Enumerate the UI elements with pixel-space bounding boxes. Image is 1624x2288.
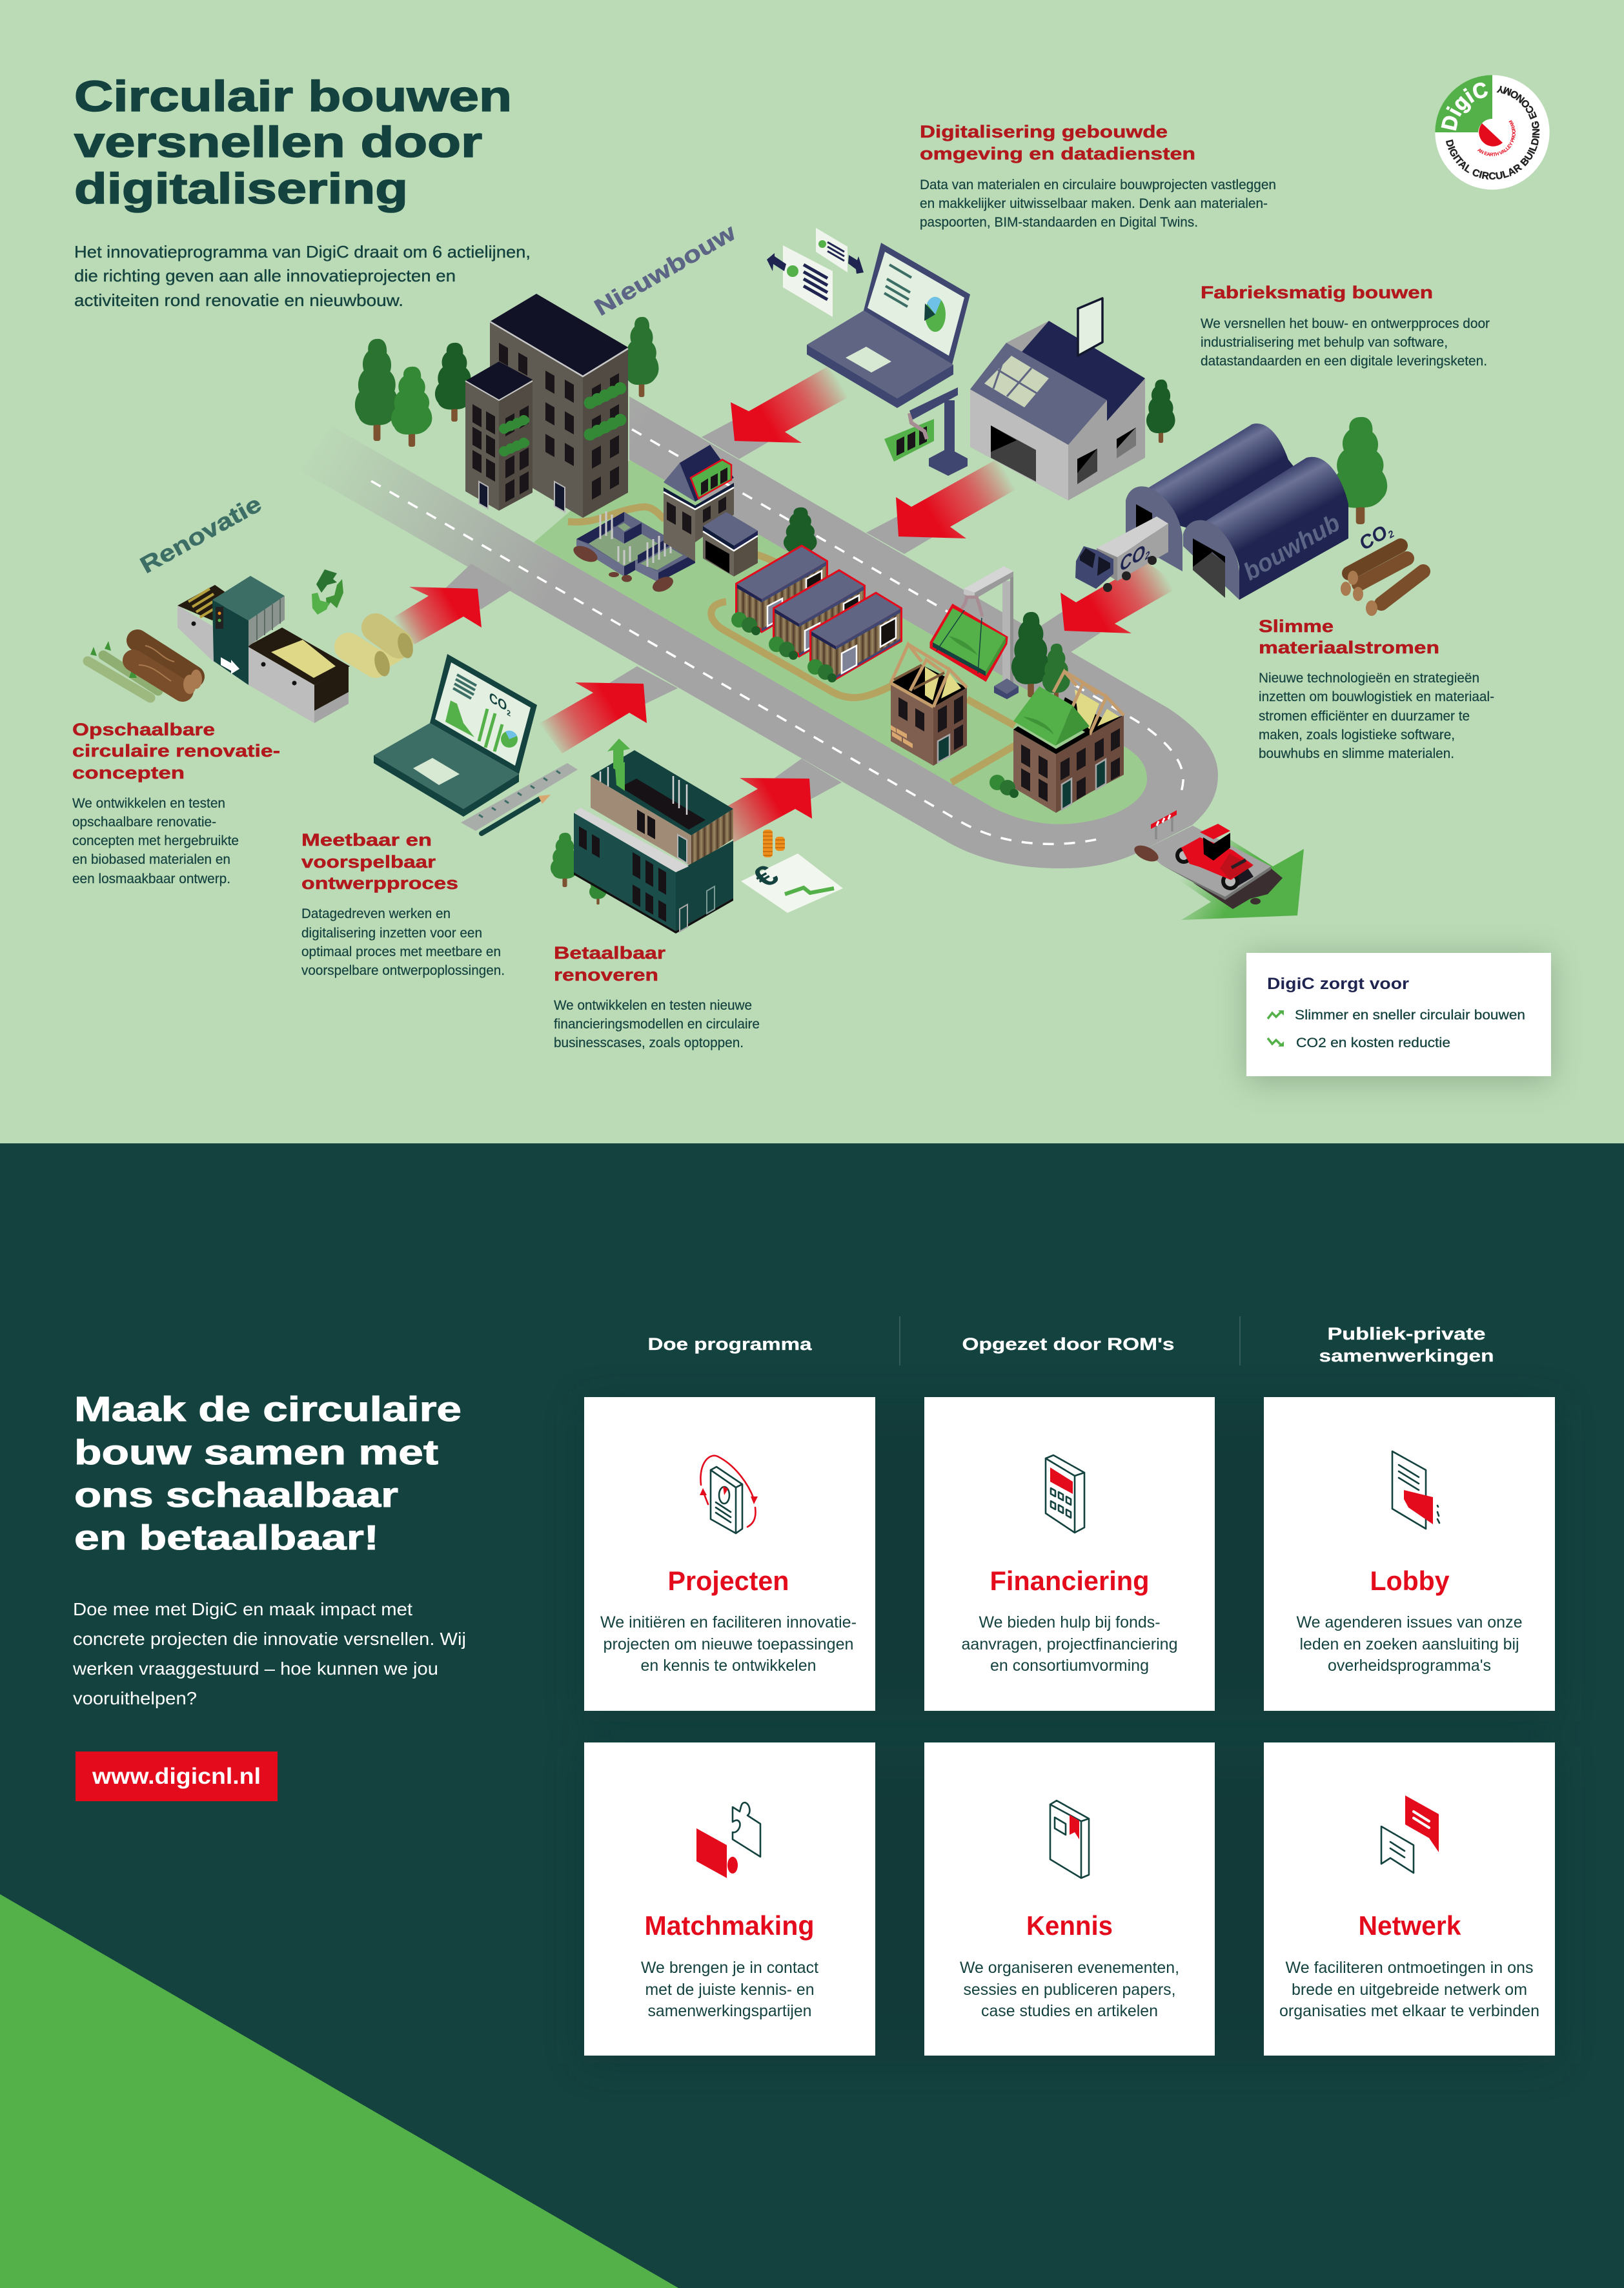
action line: Meetbaar en voorspelbaar ontwerpproces: voorspelbaar	[301, 852, 436, 872]
road roller on new road slab	[1132, 824, 1283, 909]
red arrow: affordable renovation	[728, 778, 812, 843]
map: side streets	[445, 421, 1101, 799]
house with green dormer	[664, 445, 758, 577]
action line: Digitalisering gebouwde omgeving en datadiensten	[920, 122, 1276, 230]
card: Matchmaking: samenwerkingspartijen	[648, 2002, 812, 2020]
map: lawn inside road loop	[534, 455, 1149, 835]
card: Lobby	[1264, 1397, 1555, 1711]
action line: Slimme materiaalstromen: Slimme	[1259, 617, 1334, 636]
red arrow: smart material flows	[1061, 562, 1181, 633]
logs with CO2 label: 2	[1386, 528, 1397, 541]
action line: Slimme materiaalstromen: inzetten om bouwlogistiek en materiaal-	[1259, 689, 1494, 704]
action line: Fabrieksmatig bouwen: Fabrieksmatig bouwen	[1201, 283, 1433, 302]
text: call to action: werken vraaggestuurd – hoe kunnen we jou	[72, 1659, 438, 1679]
title: versnellen door	[74, 118, 482, 167]
renovated house with open roof	[891, 644, 967, 766]
text: call to action: Doe mee met DigiC en maak impact met	[73, 1599, 412, 1619]
action line: Digitalisering gebouwde omgeving en datadiensten: en makkelijker uitwisselbaar maken. Denk aan materialen-	[920, 196, 1268, 211]
column headers: Doe programma	[648, 1334, 813, 1354]
action line: Meetbaar en voorspelbaar ontwerpproces: Datagedreven werken en	[301, 906, 451, 921]
button: www.digicnl.nl	[76, 1752, 278, 1801]
action line: Slimme materiaalstromen: maken, zoals logistieke software,	[1259, 728, 1455, 742]
plate with euro sign and rising arrow: €	[745, 859, 786, 894]
heading: Maak de circulaire bouw: bouw samen met	[74, 1433, 438, 1472]
action line: Digitalisering gebouwde omgeving en datadiensten: Data van materialen en circulaire bouwprojecten vastleggen	[920, 178, 1276, 192]
green corner triangle	[0, 1894, 678, 2288]
house with green roof	[990, 671, 1124, 813]
card: Matchmaking	[584, 1742, 875, 2056]
action line: Opschaalbare circulaire renovatieconcepten: concepten	[72, 763, 185, 782]
plate with euro sign and rising arrow	[741, 853, 843, 913]
action line: Meetbaar en voorspelbaar ontwerpproces: digitalisering inzetten voor een	[301, 926, 482, 941]
action line: Slimme materiaalstromen	[1259, 617, 1494, 761]
action line: Betaalbaar renoveren: businesscases, zoals optoppen.	[554, 1036, 744, 1050]
action line: Fabrieksmatig bouwen: datastandaarden en een digitale leveringsketen.	[1201, 354, 1487, 369]
card: Matchmaking: met de juiste kennis- en	[645, 1981, 815, 1999]
gantry crane with green roof module	[931, 566, 1019, 699]
icon: calculator	[1046, 1455, 1084, 1533]
logo: DigiC badge: AN EARTH VALLEY PROGRAM	[1477, 120, 1516, 156]
action line: Betaalbaar renoveren: financieringsmodellen en circulaire	[554, 1017, 760, 1032]
small apartment tower	[465, 362, 533, 511]
icon: puzzle pieces	[696, 1803, 760, 1878]
action line: Digitalisering gebouwde omgeving en datadiensten: Digitalisering gebouwde	[920, 122, 1168, 141]
card: Projecten	[584, 1397, 875, 1711]
action line: Fabrieksmatig bouwen: We versnellen het bouw- en ontwerpproces door	[1201, 316, 1490, 331]
green laptop with CO2 dashboard: 2	[507, 708, 511, 719]
card: Lobby: leden en zoeken aansluiting bij	[1300, 1635, 1519, 1653]
small gantry with green module	[884, 387, 968, 476]
callout: DigiC zorgt voor: Slimmer en sneller circulair bouwen	[1295, 1008, 1525, 1023]
red arrow: upscalable renovation concepts	[389, 587, 482, 644]
action line: Digitalisering gebouwde omgeving en datadiensten: omgeving en datadiensten	[920, 144, 1195, 163]
action line: Opschaalbare circulaire renovatieconcepten: We ontwikkelen en testen	[72, 796, 225, 811]
icon: recycling arrows	[312, 569, 343, 615]
bouwhub front hangar: bouwhub	[1239, 509, 1345, 586]
background: light green top section	[0, 0, 1624, 1143]
action line: Slimme materiaalstromen: bouwhubs en slimme materialen.	[1259, 746, 1454, 761]
bouwhub back hangar	[1126, 424, 1297, 571]
card: Kennis: We organiseren evenementen,	[960, 1959, 1179, 1977]
road barrier	[1151, 810, 1177, 839]
heading: Maak de circulaire bouw: Maak de circulaire	[74, 1390, 462, 1429]
red arrow: factory-based building	[896, 460, 1019, 538]
icon: document with megaphone	[1392, 1451, 1439, 1529]
coins	[763, 830, 785, 857]
logo: DigiC badge: DIGITAL CIRCULAR BUILDING ECONOMY	[1446, 85, 1540, 179]
card: Financiering: We bieden hulp bij fonds-	[979, 1613, 1161, 1631]
callout shadow	[1246, 955, 1551, 1081]
action line: Meetbaar en voorspelbaar ontwerpproces: voorspelbare ontwerpoplossingen.	[301, 963, 505, 978]
icon: book with bookmark	[1050, 1801, 1089, 1878]
action line: Betaalbaar renoveren	[554, 943, 760, 1050]
card: Lobby: overheidsprogramma's	[1328, 1657, 1491, 1675]
green laptop with CO2 dashboard: CO	[489, 689, 507, 715]
card: Projecten: en kennis te ontwikkelen	[640, 1657, 816, 1675]
card: Netwerk: We faciliteren ontmoetingen in ons	[1286, 1959, 1534, 1977]
action line: Opschaalbare circulaire renovatieconcepten: en biobased materialen en	[72, 852, 230, 867]
heading: Maak de circulaire bouw: en betaalbaar!	[74, 1518, 379, 1557]
card: Kennis: sessies en publiceren papers,	[963, 1981, 1176, 1999]
heading: Maak de circulaire bouw	[74, 1390, 462, 1557]
column headers	[648, 1316, 1494, 1365]
action line: Betaalbaar renoveren: We ontwikkelen en testen nieuwe	[554, 998, 752, 1013]
title: Circulair bouwen	[74, 72, 512, 121]
icon: speech bubbles	[1381, 1795, 1439, 1873]
trees behind green-roof house	[1011, 612, 1070, 702]
intro text: activiteiten rond renovatie en nieuwbouw.	[74, 291, 403, 310]
text: call to action: vooruithelpen?	[73, 1688, 197, 1708]
small trees next to renovation building	[551, 833, 607, 904]
map: road centre dashes	[371, 429, 1183, 844]
card: Financiering: Financiering	[990, 1566, 1149, 1596]
map: road loop	[300, 396, 1218, 868]
label: Renovatie: Renovatie	[136, 490, 266, 578]
intro text	[74, 242, 531, 310]
action line: Fabrieksmatig bouwen	[1201, 283, 1490, 369]
trees left of tall building	[355, 317, 658, 447]
map: sand paths	[568, 507, 1015, 782]
card: Projecten: Projecten	[667, 1566, 789, 1596]
card: Kennis: Kennis	[1026, 1910, 1113, 1941]
renovation machine with insulation	[178, 576, 350, 723]
action line: Opschaalbare circulaire renovatieconcepten: concepten met hergebruikte	[72, 833, 239, 848]
intro text: die richting geven aan alle innovatieprojecten en	[74, 266, 456, 285]
building foundation under construction	[571, 511, 695, 595]
text: call to action: concrete projecten die innovatie versnellen. Wij	[73, 1629, 466, 1649]
card: Financiering: aanvragen, projectfinanciering	[962, 1635, 1177, 1653]
background: dark green bottom section	[0, 1143, 1624, 2288]
title	[74, 72, 512, 213]
card: Financiering	[924, 1397, 1215, 1711]
action line: Digitalisering gebouwde omgeving en datadiensten: paspoorten, BIM-standaarden en Digital Twins.	[920, 215, 1198, 230]
card: Netwerk: Netwerk	[1358, 1910, 1461, 1941]
action line: Slimme materiaalstromen: stromen efficiënter en duurzamer te	[1259, 709, 1470, 724]
action line: Meetbaar en voorspelbaar ontwerpproces: Meetbaar en	[301, 830, 432, 850]
renovation building with green arrow	[574, 739, 733, 934]
action line: Opschaalbare circulaire renovatieconcepten: circulaire renovatie-	[72, 741, 280, 761]
action line: Opschaalbare circulaire renovatieconcepten	[72, 720, 280, 886]
card: Matchmaking: We brengen je in contact	[641, 1959, 818, 1977]
card: Kennis	[924, 1742, 1215, 2056]
tall apartment building	[490, 294, 628, 518]
bouwhub tree	[1333, 417, 1387, 524]
upper laptop with floating documents	[767, 228, 970, 408]
red arrow: digitalisation and data services	[731, 367, 853, 443]
truck with CO2 label: CO	[1120, 541, 1145, 577]
truck with CO2 label: 2	[1144, 549, 1150, 563]
green arrow: road extension	[1162, 839, 1304, 920]
button: www.digicnl.nl: www.digicnl.nl	[92, 1764, 261, 1789]
column headers: samenwerkingen	[1319, 1346, 1494, 1365]
green laptop with CO2 dashboard	[374, 654, 578, 833]
action line: Betaalbaar renoveren: renoveren	[554, 965, 658, 985]
card: Projecten: projecten om nieuwe toepassingen	[603, 1635, 853, 1653]
action line: Opschaalbare circulaire renovatieconcepten: opschaalbare renovatie-	[72, 815, 216, 830]
text: call to action	[72, 1599, 466, 1708]
column headers: Publiek-private	[1327, 1324, 1486, 1343]
red arrow: measurable design process	[539, 682, 647, 753]
action line: Meetbaar en voorspelbaar ontwerpproces	[301, 830, 505, 978]
action line: Slimme materiaalstromen: materiaalstromen	[1259, 638, 1439, 657]
factory with solar panels and phone	[970, 298, 1175, 500]
callout: DigiC zorgt voor: CO2 en kosten reductie	[1296, 1036, 1450, 1050]
card: Lobby: We agenderen issues van onze	[1296, 1613, 1522, 1631]
card: Matchmaking: Matchmaking	[644, 1910, 815, 1941]
card: Financiering: en consortiumvorming	[990, 1657, 1149, 1675]
card: Projecten: We initiëren en faciliteren innovatie-	[600, 1613, 857, 1631]
action line: Meetbaar en voorspelbaar ontwerpproces: ontwerpproces	[301, 873, 458, 893]
action line: Opschaalbare circulaire renovatieconcepten: Opschaalbare	[72, 720, 215, 739]
card: Netwerk: brede en uitgebreide netwerk om	[1292, 1981, 1527, 1999]
label: Nieuwbouw: Nieuwbouw	[590, 218, 740, 321]
tree on lawn behind barracks	[784, 507, 817, 562]
title: digitalisering	[74, 165, 408, 213]
logs with CO2 label	[1341, 518, 1423, 616]
callout: DigiC zorgt voor	[1246, 953, 1551, 1076]
modular wooden barracks with bushes	[731, 547, 900, 682]
card: Netwerk	[1264, 1742, 1555, 2056]
action line: Slimme materiaalstromen: Nieuwe technologieën en strategieën	[1259, 671, 1479, 686]
column headers: Opgezet door ROM's	[962, 1334, 1175, 1354]
card: Kennis: case studies en artikelen	[981, 2002, 1158, 2020]
action line: Betaalbaar renoveren: Betaalbaar	[554, 943, 666, 963]
action line: Opschaalbare circulaire renovatieconcepten: een losmaakbaar ontwerp.	[72, 872, 230, 886]
truck with CO2 label	[1075, 516, 1168, 592]
card: Lobby: Lobby	[1370, 1566, 1450, 1596]
icon: document in cycle	[700, 1456, 758, 1533]
logs and bamboo (biobased materials)	[88, 640, 202, 698]
bouwhub front hangar	[1183, 457, 1348, 600]
logs with CO2 label: CO	[1355, 522, 1391, 555]
logo: DigiC badge: DigiC	[1441, 83, 1488, 130]
heading: Maak de circulaire bouw: ons schaalbaar	[74, 1476, 398, 1515]
intro text: Het innovatieprogramma van DigiC draait om 6 actielijnen,	[74, 242, 531, 261]
action line: Meetbaar en voorspelbaar ontwerpproces: optimaal proces met meetbare en	[301, 945, 501, 959]
action line: Fabrieksmatig bouwen: industrialisering met behulp van software,	[1201, 335, 1448, 350]
callout: DigiC zorgt voor: DigiC zorgt voor	[1267, 975, 1409, 993]
card: Netwerk: organisaties met elkaar te verbinden	[1279, 2002, 1539, 2020]
insulation rolls	[334, 628, 416, 678]
card shadows	[584, 1404, 1555, 2063]
